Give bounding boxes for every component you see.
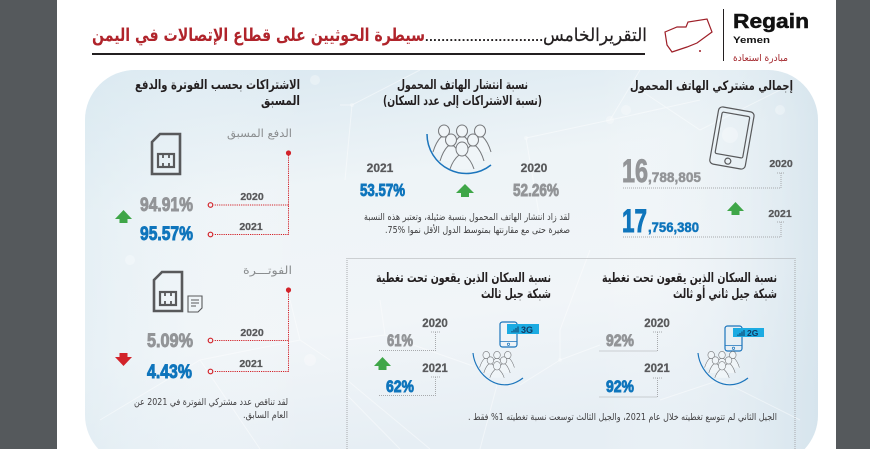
heading: نسبة السكان الذين يقعون تحت تغطية <box>376 271 551 286</box>
icon: bill <box>188 296 202 312</box>
icon: SIM postpaid <box>154 272 182 311</box>
timeline: postpaid <box>208 287 291 374</box>
side bar: right <box>836 0 870 449</box>
panel: subscribers by billing type <box>115 78 300 421</box>
header: logo <box>724 9 809 64</box>
year 2020: 2020 <box>422 318 448 330</box>
logo arabic tagline: مبادرة استعادة <box>733 53 788 64</box>
label: prepaid: الدفع المسبق <box>227 127 292 141</box>
arrow: down <box>115 353 132 366</box>
arrow: up <box>374 357 391 370</box>
leader 2020 <box>622 173 785 188</box>
year 2021: 2021 <box>644 363 670 375</box>
heading line 2: شبكة جيل ثاني أو ثالث <box>673 285 777 302</box>
icon: phone 2G <box>725 326 764 351</box>
year 2021: 2021 <box>422 363 448 375</box>
title: main heading: سيطرة الحوثيين على قطاع الإتصالات في اليمن <box>92 25 425 46</box>
value 4.43%: 4.43% <box>147 362 192 383</box>
arrow: up <box>115 210 132 223</box>
year 2020: 2020 <box>521 161 548 175</box>
icon: people with arc <box>427 125 491 174</box>
year 2021: 2021 <box>239 221 263 233</box>
icon: people with arc <box>473 351 523 385</box>
note: لقد زاد انتشار الهاتف المحمول بنسبة ضئيلة، وتعتبر هذه النسبة <box>364 212 570 223</box>
value 17,756,380: ,756,380 <box>648 219 699 235</box>
icon: SIM prepaid <box>152 134 180 174</box>
arrow: up <box>727 202 744 215</box>
value 95.57%: 95.57% <box>140 224 193 245</box>
value 16,788,805: ,788,805 <box>648 169 701 185</box>
heading line 2: شبكة جيل ثالث <box>481 287 551 302</box>
value 5.09%: 5.09% <box>147 331 193 352</box>
value 16,788,805: 16 <box>622 153 648 189</box>
panel: mobile penetration <box>360 78 570 236</box>
timeline: prepaid <box>208 150 291 237</box>
value 53.57%: 53.57% <box>360 180 405 200</box>
year 2020: 2020 <box>769 158 793 170</box>
heading: الاشتراكات بحسب الفوترة والدفع <box>135 78 300 93</box>
title: dots: ............................. <box>425 29 543 44</box>
value 62%: 62% <box>386 377 414 396</box>
icon: smartphone <box>709 106 755 170</box>
year 2021: 2021 <box>768 208 792 220</box>
leader 2021 <box>622 222 785 237</box>
panel: 2G or 3G coverage <box>599 271 777 397</box>
year 2020: 2020 <box>644 318 670 330</box>
value 61%: 61% <box>387 331 413 350</box>
arrow: up <box>456 184 474 197</box>
value 94.91%: 94.91% <box>140 195 193 216</box>
side bar: left <box>0 0 57 449</box>
coverage note: الجيل الثاني لم تتوسع تغطيته خلال عام 2021، والجيل الثالث توسعت نسبة تغطيته 1% فقط . <box>468 412 777 423</box>
value 92%: 92% <box>606 331 634 350</box>
heading: إجمالي مشتركي الهاتف المحمول <box>630 79 793 94</box>
icon: phone 3G <box>500 322 539 347</box>
note: لقد تناقص عدد مشتركي الفوترة في 2021 عن <box>134 397 288 408</box>
heading: نسبة السكان الذين يقعون تحت تغطية <box>602 271 777 286</box>
panel: 3G coverage <box>374 271 551 396</box>
title <box>92 25 647 55</box>
year 2021: 2021 <box>239 358 263 370</box>
heading line 2: المسبق <box>261 94 300 109</box>
leader 2020 <box>378 332 440 350</box>
panel: total mobile subscribers <box>622 79 793 239</box>
title: report label: التقريرالخامس <box>543 25 647 46</box>
note line 2: صغيرة حتى مع مقارنتها بمتوسط الدول الأقل نموا %75. <box>385 224 570 236</box>
panel: background <box>85 70 818 449</box>
year 2020: 2020 <box>240 327 264 339</box>
year 2021: 2021 <box>367 161 394 175</box>
heading line 2: (نسبة الاشتراكات إلى عدد السكان) <box>383 94 542 109</box>
icon: people with arc <box>698 351 748 385</box>
heading: نسبة انتشار الهاتف المحمول <box>397 78 528 93</box>
value 52.26%: 52.26% <box>513 180 559 200</box>
leader 2021 <box>599 378 662 397</box>
label: postpaid: الفوتـــرة <box>243 264 292 277</box>
panel: network coverage dotted frame <box>347 258 795 449</box>
title underline <box>92 53 645 55</box>
leader 2021 <box>378 377 440 396</box>
logo subword: Yemen <box>733 35 770 46</box>
icon: Yemen map <box>665 19 712 52</box>
note line 2: العام السابق. <box>243 410 288 421</box>
year 2020: 2020 <box>240 191 264 203</box>
icon: phone 2G: 2G <box>747 328 759 338</box>
logo wordmark: Regain <box>733 11 809 33</box>
value 17,756,380: 17 <box>622 203 647 239</box>
value 92%: 92% <box>606 377 634 396</box>
leader 2020 <box>599 332 662 351</box>
logo divider <box>722 9 724 61</box>
icon: phone 3G: 3G <box>521 325 533 335</box>
